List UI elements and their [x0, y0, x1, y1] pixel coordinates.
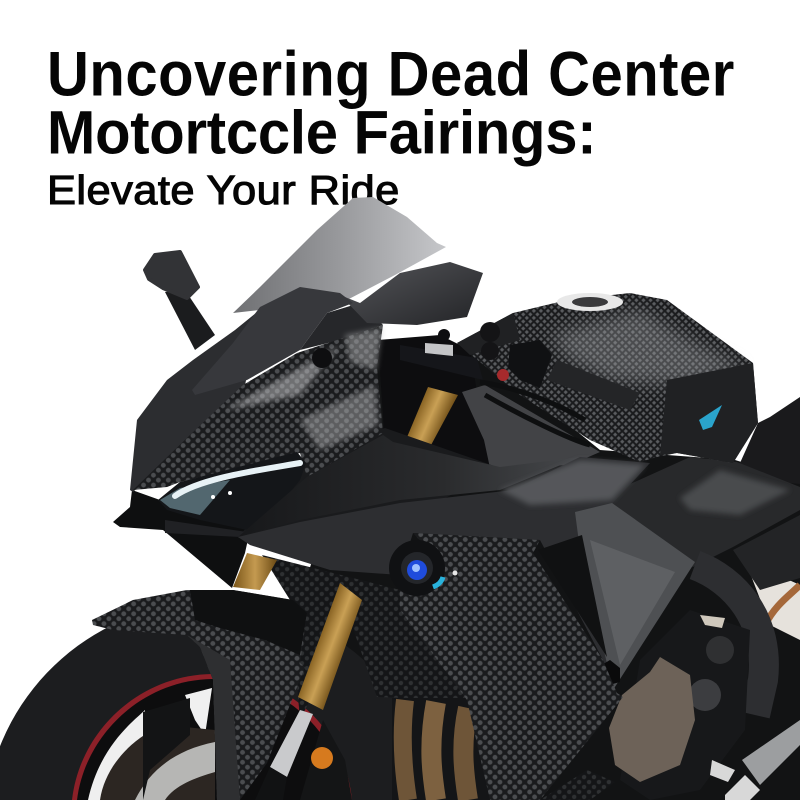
frame arc [695, 565, 764, 715]
side fairing wing [238, 457, 690, 683]
dark screen base [300, 303, 383, 350]
dark wing panel [238, 435, 580, 537]
front tyre [0, 602, 438, 800]
blue indicator light [389, 540, 458, 596]
right mirror [340, 262, 483, 325]
exhaust pipes [392, 698, 492, 800]
grey vent highlights [500, 460, 695, 697]
handlebar area dark backdrop [378, 335, 490, 470]
engine cover [609, 657, 695, 782]
left smooth fairing [130, 308, 262, 492]
seat [740, 397, 800, 484]
windscreen [233, 197, 446, 313]
left mirror [145, 252, 215, 350]
upper fork tube [405, 387, 458, 447]
front wheel rim [72, 674, 352, 800]
lower fork left tube [233, 553, 277, 590]
wing backing [238, 428, 500, 538]
handlebar and controls [400, 322, 640, 445]
side carbon panel [400, 533, 623, 800]
title line 2: Motortccle Fairings: [47, 99, 596, 167]
front chin [113, 490, 250, 588]
rear side panel [613, 457, 800, 590]
lower headlight lip [165, 520, 247, 537]
mid grey panel [462, 385, 600, 468]
lower fork right tube [255, 583, 362, 800]
dark radiator carbon [262, 555, 467, 720]
lower carbon vent [540, 770, 615, 800]
title: Uncovering Dead Center [47, 39, 735, 109]
headlight [158, 452, 306, 530]
tank [457, 293, 758, 463]
front fender [92, 590, 307, 800]
subtitle: Elevate Your Ride [47, 167, 400, 213]
engine parts [620, 610, 750, 800]
front carbon panel [133, 325, 383, 490]
rear body and frame backdrop [300, 340, 800, 800]
dark screen lens [192, 287, 353, 395]
